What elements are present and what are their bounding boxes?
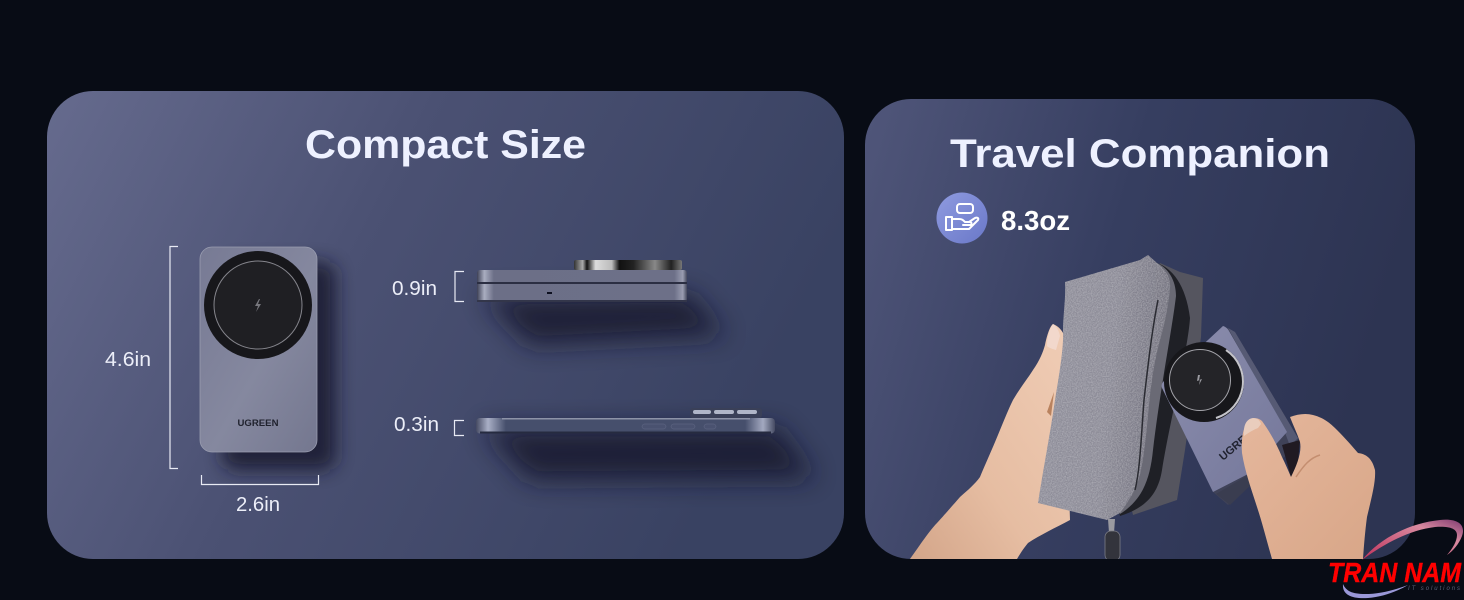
dimension: width 2.6in: 2.6in	[236, 494, 280, 516]
pouch back flap	[1132, 263, 1203, 515]
dimension: height 4.6in: 4.6in	[105, 349, 151, 371]
logo: Tran Nam IT solutions	[1328, 520, 1463, 598]
logo: Tran Nam IT solutions: IT solutions	[1408, 586, 1460, 592]
left hand	[910, 324, 1070, 559]
dimension: height 4.6in	[105, 246, 178, 468]
power bank side view	[477, 260, 725, 345]
panel: travel companion	[865, 99, 1415, 561]
pouch zipper tape	[1120, 263, 1176, 514]
dimension: width 2.6in	[202, 475, 318, 516]
pouch seam	[1135, 300, 1158, 490]
heading: Travel Companion: Travel Companion	[950, 132, 1330, 176]
right hand	[1242, 414, 1375, 559]
panel: compact size	[47, 91, 844, 559]
dimension: depth 0.3in	[394, 414, 464, 436]
heading: Compact Size: Compact Size	[305, 123, 586, 167]
phone side view	[476, 408, 815, 480]
dimension: depth 0.9in: 0.9in	[392, 278, 437, 300]
power bank front view	[200, 247, 336, 470]
power bank held in hand: UGREEN	[1217, 424, 1261, 463]
weight label: 8.3oz	[1001, 205, 1070, 236]
dimension: depth 0.3in: 0.3in	[394, 414, 439, 436]
pouch front	[1038, 255, 1170, 520]
photo: hands holding pouch and power bank	[910, 255, 1375, 561]
icon: weight in hand	[936, 192, 988, 244]
power bank held in hand	[1162, 326, 1298, 505]
shadow behind thumb	[1282, 440, 1300, 477]
dimension: depth 0.9in	[392, 272, 464, 302]
power bank front view: UGREEN	[238, 418, 279, 429]
zipper pull	[1105, 519, 1120, 561]
pouch zipper band	[1119, 263, 1190, 516]
